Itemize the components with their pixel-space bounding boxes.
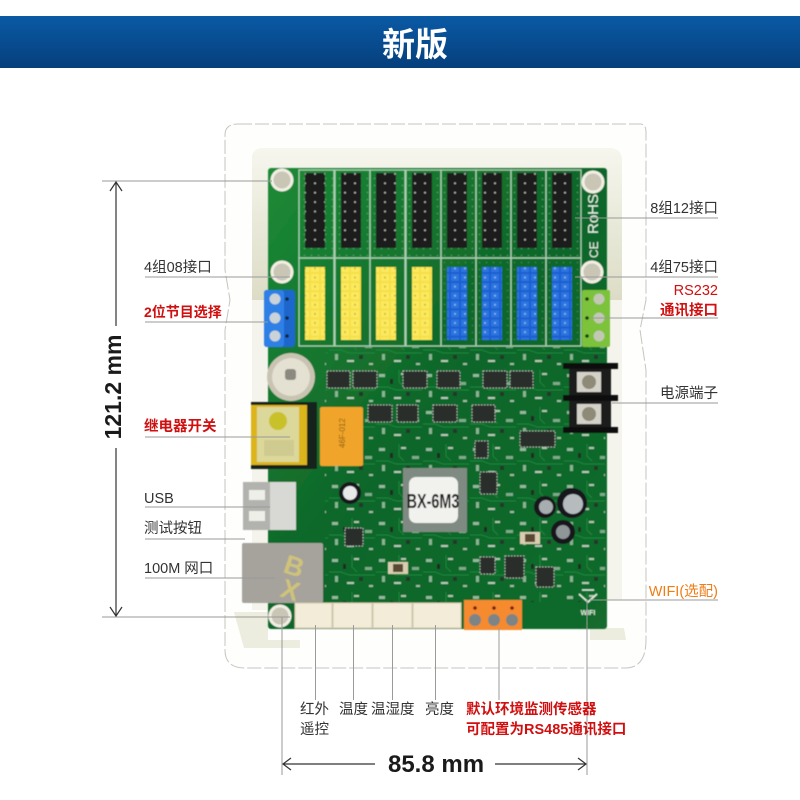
main controller chip BX-6M3: BX-6M3 (407, 490, 460, 513)
blue 2-position terminal (264, 290, 295, 347)
RoHS and CE marks (585, 194, 602, 258)
label: infrared remote: 红外 (300, 702, 329, 718)
4 groups of 75 blue headers (447, 267, 572, 340)
label: WiFi optional: WIFI(选配) (649, 583, 718, 600)
orange environment sensor terminal (464, 600, 522, 630)
label: infrared remote: 遥控 (300, 721, 329, 738)
label: 12 interfaces: 8组12接口 (650, 200, 718, 217)
width dimension 85.8 mm (283, 751, 586, 778)
PCB base (268, 168, 607, 629)
height dimension 121.2 mm: 121.2 mm (100, 335, 126, 439)
USB port (243, 482, 296, 530)
coin battery (267, 353, 315, 401)
label: comms interface: 通讯接口 (660, 302, 718, 319)
8 groups of 12-way black headers (305, 173, 572, 248)
width dimension 85.8 mm: 85.8 mm (388, 751, 484, 778)
label: 100M network port: 100M 网口 (144, 561, 213, 577)
label: temperature and humidity: 温湿度 (371, 701, 414, 718)
leader lines (102, 181, 718, 775)
main controller chip BX-6M3 (403, 468, 467, 532)
label: power terminal: 电源端子 (660, 385, 718, 402)
row of driver chips (327, 371, 555, 587)
WiFi mark: WIFI (581, 610, 595, 617)
left labels (144, 259, 222, 577)
label: environment sensor note: 默认环境监测传感器 (466, 702, 596, 718)
tact buttons (388, 532, 540, 574)
label: program select: 2位节目选择 (144, 304, 222, 320)
white sensor connectors (295, 603, 461, 628)
orange relay: 46F-012 (338, 418, 347, 448)
label: RS232: RS232 (674, 283, 718, 299)
label: 75 interfaces: 4组75接口 (650, 259, 718, 276)
RJ45 network port: B (280, 549, 308, 584)
enclosure: white foam tray (225, 124, 646, 668)
black power terminal (563, 363, 618, 433)
RJ45 network port: X (277, 573, 304, 607)
RoHS and CE marks: CE (587, 241, 601, 258)
RJ45 network port (242, 543, 323, 607)
orange relay (320, 407, 363, 466)
WiFi mark (579, 590, 597, 617)
label: temperature: 温度 (339, 701, 368, 718)
label: USB: USB (144, 491, 174, 507)
bottom labels (300, 700, 626, 738)
mounting holes (270, 170, 603, 626)
PCB component texture (325, 347, 605, 602)
capacitors (339, 482, 587, 544)
header cells grid (299, 170, 581, 346)
height dimension 121.2 mm (100, 182, 126, 616)
label: brightness: 亮度 (425, 701, 454, 718)
circuit board (242, 168, 618, 630)
RoHS and CE marks: RoHS (585, 194, 602, 234)
right labels (649, 200, 718, 600)
4 groups of 08 yellow headers (305, 267, 432, 340)
green RS232 terminal (582, 290, 610, 347)
title banner (0, 16, 800, 68)
label: 08 interfaces: 4组08接口 (144, 259, 212, 276)
label: environment sensor note: 可配置为RS485通讯接口 (466, 721, 626, 738)
relay switch with clear cover (251, 402, 317, 469)
label: test button: 测试按钮 (144, 520, 202, 537)
label: relay switch: 继电器开关 (144, 417, 217, 435)
title banner: 新版 (382, 26, 448, 63)
